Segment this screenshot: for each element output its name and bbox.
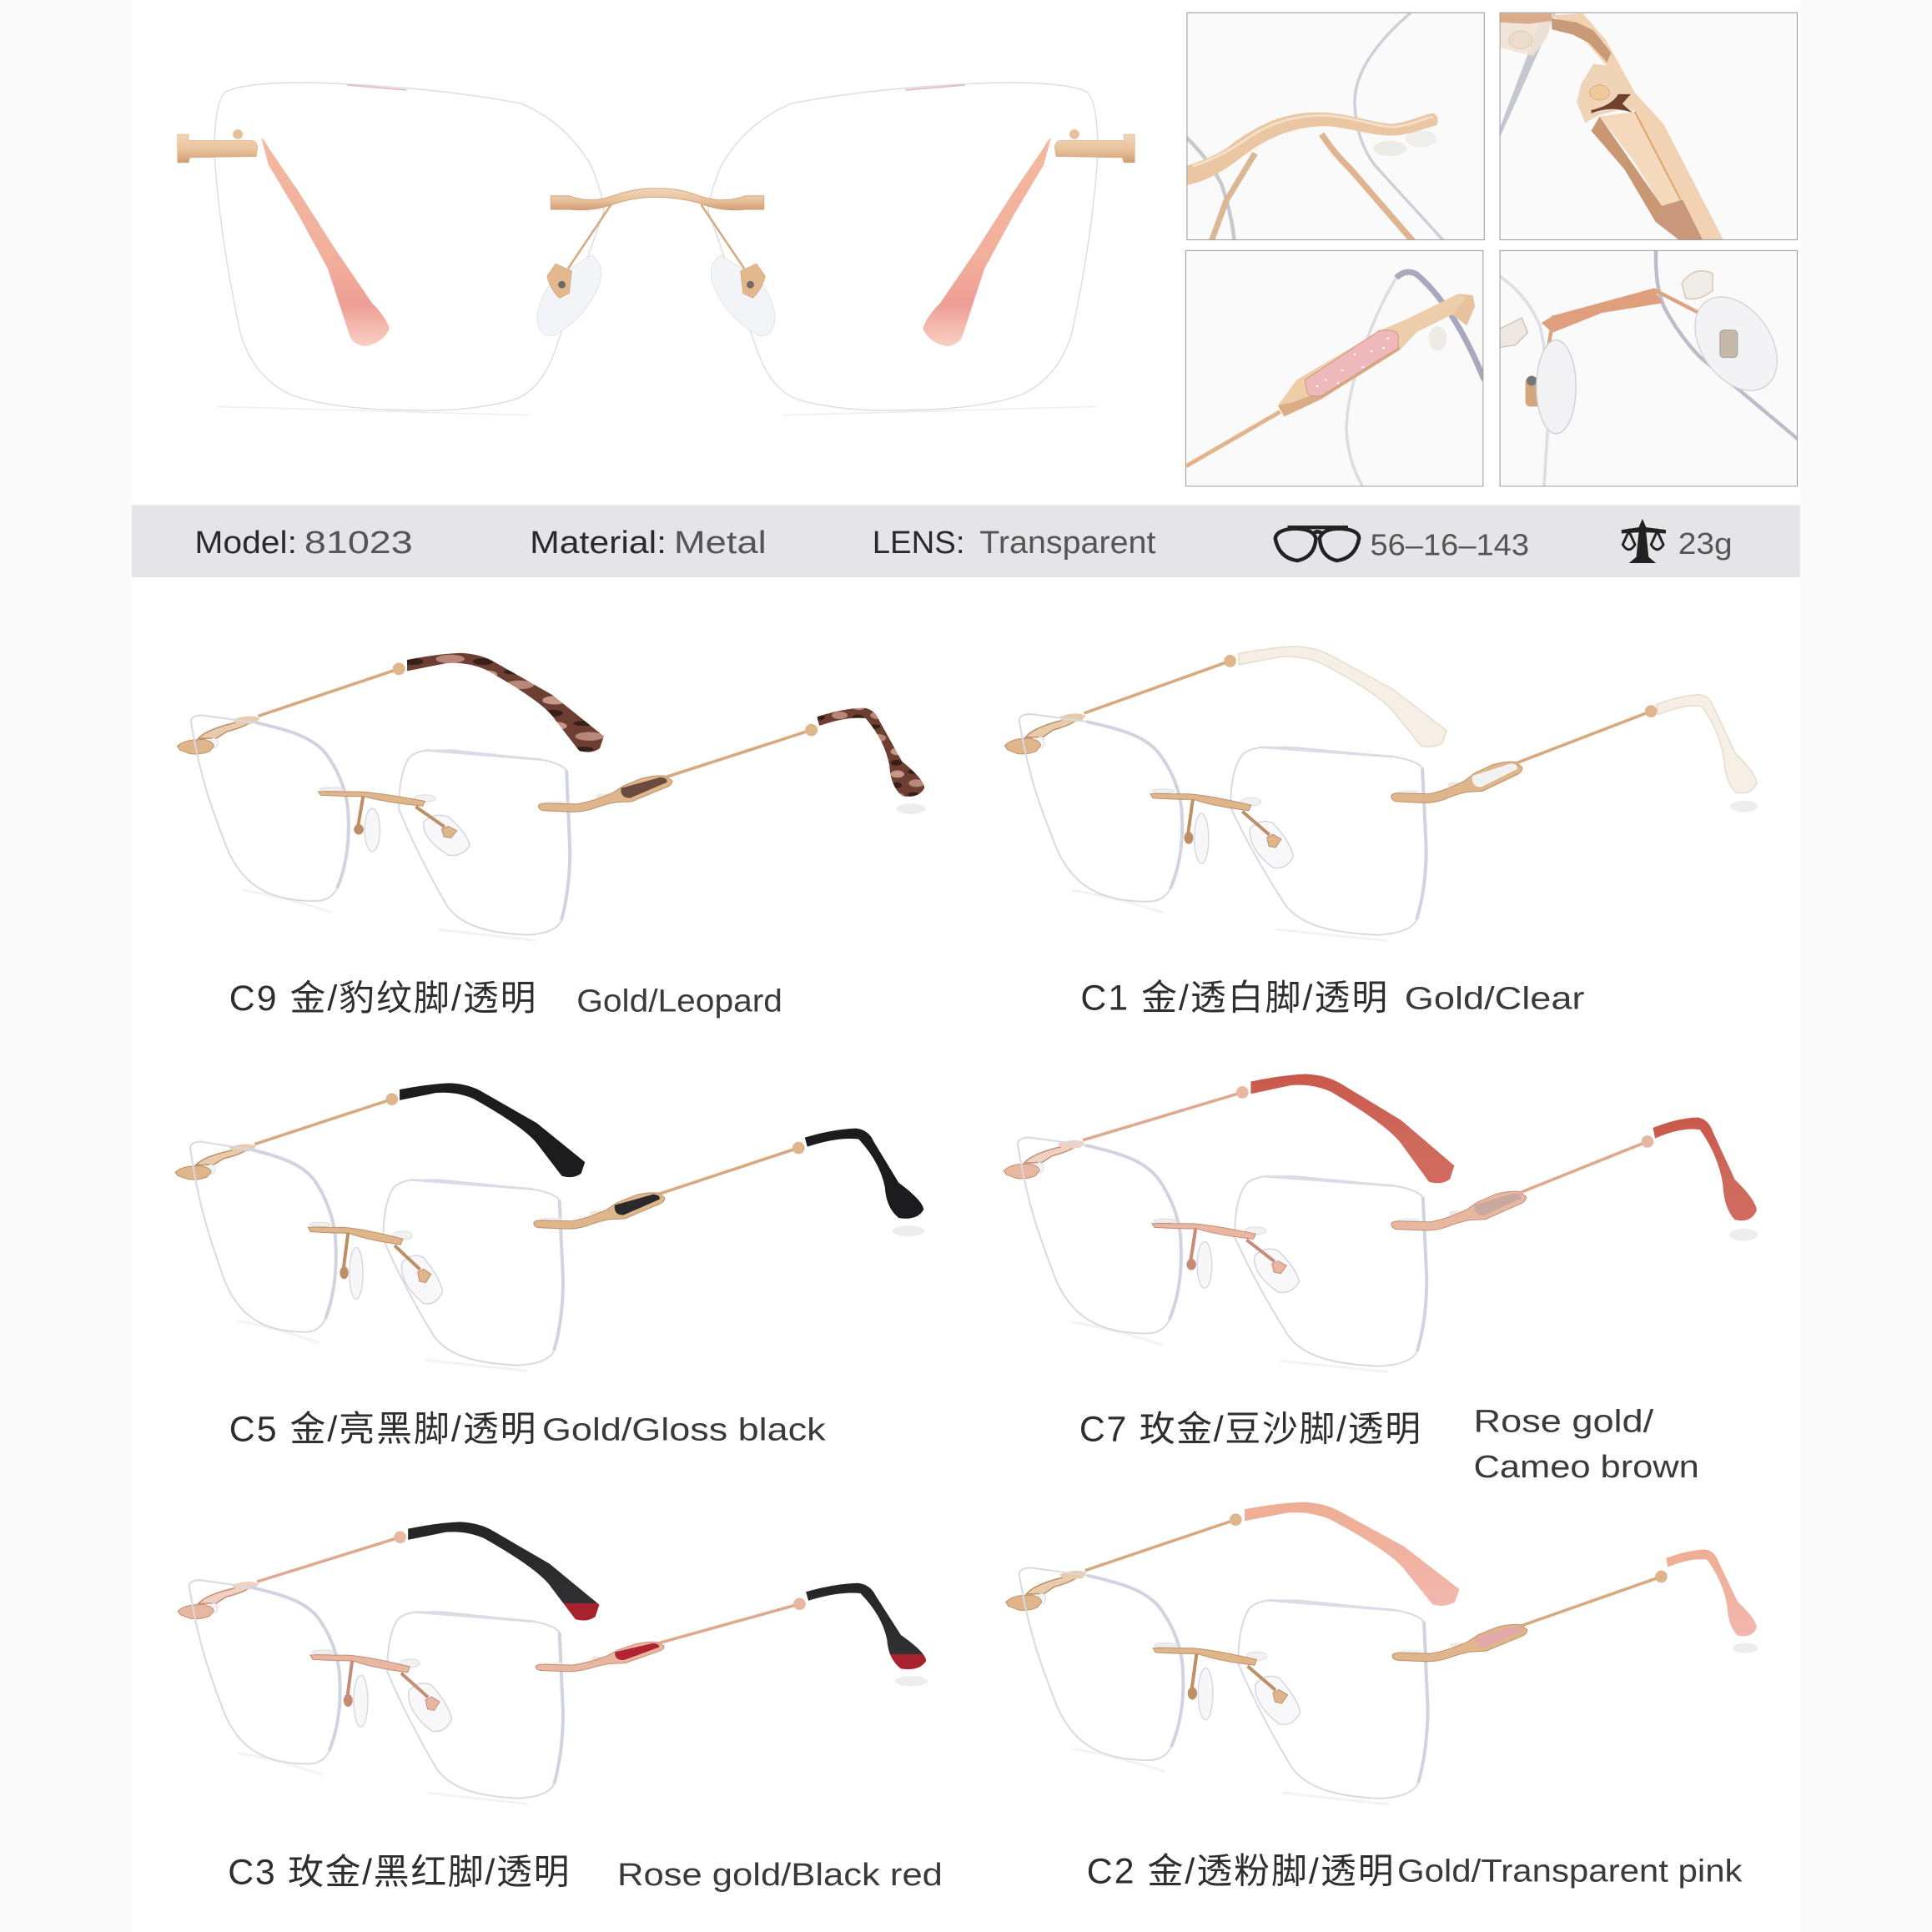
model: Model:	[194, 525, 297, 561]
near temple	[805, 1129, 925, 1236]
caption: C7: Cameo brown	[1474, 1449, 1699, 1485]
far temple	[408, 1522, 599, 1621]
caption: C3: Rose gold/Black red	[617, 1857, 943, 1893]
lens: Transparent	[979, 525, 1156, 561]
material: Material:	[530, 525, 667, 561]
material	[530, 525, 767, 561]
caption: C9	[229, 979, 782, 1019]
caption: C7	[1079, 1403, 1699, 1485]
near temple	[806, 1583, 928, 1686]
end piece	[536, 1642, 664, 1672]
end piece	[1392, 1624, 1527, 1662]
lenses	[1019, 1567, 1183, 1772]
bridge	[551, 189, 764, 210]
caption: C9: C9 金/豹纹脚/透明	[229, 979, 536, 1019]
frame size: 56–16–143	[1370, 527, 1529, 561]
bridge and nose pads	[1152, 1219, 1299, 1292]
bridge and nose pads	[308, 1222, 443, 1304]
caption: C1: Gold/Clear	[1405, 981, 1585, 1017]
caption: C7: Rose gold/	[1474, 1403, 1654, 1439]
glasses: C3 rose gold / black red	[178, 1522, 928, 1804]
caption: C5: C5 金/亮黑脚/透明	[229, 1409, 536, 1449]
caption: C5	[229, 1409, 827, 1449]
caption: C2: C2 金/透粉脚/透明	[1087, 1852, 1394, 1892]
far temple	[400, 1083, 585, 1177]
caption: C1	[1080, 978, 1585, 1018]
bridge and nose pads	[318, 787, 470, 855]
detail photo: hinge	[1500, 13, 1798, 241]
spec bar	[132, 506, 1800, 577]
lenses	[1019, 714, 1182, 913]
caption: C5: Gold/Gloss black	[542, 1412, 827, 1448]
main front-view glasses	[178, 83, 1135, 415]
glasses: C5 gold / gloss black	[175, 1083, 925, 1371]
caption: C3	[228, 1852, 943, 1893]
lenses	[190, 1142, 336, 1343]
end piece	[1391, 762, 1522, 802]
far temple	[1250, 1074, 1454, 1183]
near temple	[1666, 1549, 1758, 1653]
lenses	[1018, 1137, 1181, 1346]
caption: C7: C7 玫金/豆沙脚/透明	[1079, 1409, 1421, 1449]
glasses: C2 gold / transparent pink	[1006, 1502, 1758, 1804]
near temple	[1653, 1117, 1758, 1241]
glasses: C7 rose gold / cameo brown	[1004, 1074, 1758, 1372]
icon: weight scale	[1622, 519, 1666, 563]
lenses	[191, 715, 349, 912]
far temple	[1239, 647, 1446, 747]
icon: glasses	[1275, 527, 1359, 561]
bridge and nose pads	[310, 1650, 452, 1732]
end piece	[534, 1193, 665, 1229]
glasses: C1 gold / clear	[1005, 647, 1758, 940]
model	[194, 525, 413, 561]
detail photo: temple with glitter pad	[1185, 250, 1484, 487]
caption: C3: C3 玫金/黑红脚/透明	[228, 1852, 569, 1892]
near temple	[817, 707, 926, 814]
bridge and nose pads	[1153, 1643, 1301, 1724]
far temple	[1245, 1502, 1460, 1606]
glasses: C9 gold / leopard	[178, 653, 926, 940]
caption: C1: C1 金/透白脚/透明	[1080, 978, 1387, 1018]
lens	[873, 525, 1156, 561]
near temple	[1657, 695, 1758, 813]
left half of frame	[178, 83, 611, 415]
right half of frame	[701, 83, 1135, 415]
lens: LENS:	[873, 525, 965, 561]
lenses	[189, 1580, 340, 1775]
weight: 23g	[1678, 526, 1733, 561]
far temple	[407, 653, 604, 752]
caption: C2: Gold/Transparent pink	[1397, 1853, 1743, 1889]
model: 81023	[304, 525, 413, 561]
detail photo: nose pads	[1500, 250, 1800, 488]
end piece	[539, 776, 672, 812]
detail photo: bridge	[1186, 13, 1485, 241]
caption: C9: Gold/Leopard	[576, 984, 782, 1019]
material: Metal	[674, 525, 767, 561]
end piece	[1391, 1191, 1527, 1230]
bridge and nose pads	[1150, 789, 1293, 868]
caption: C2	[1087, 1852, 1743, 1892]
